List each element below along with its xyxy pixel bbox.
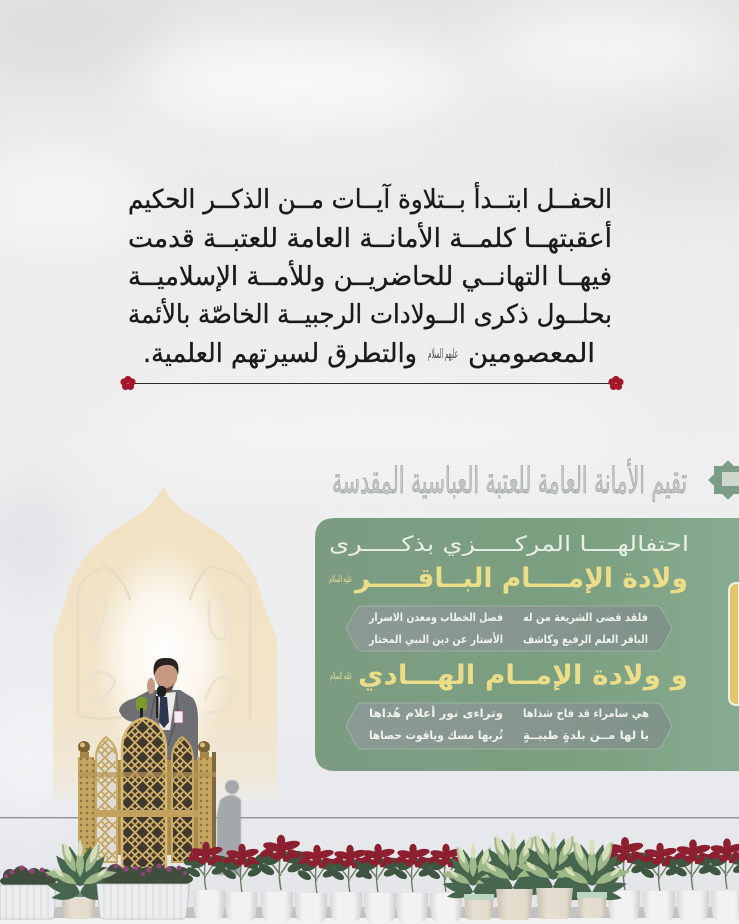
icon: red flower left — [120, 376, 136, 390]
jacket — [119, 690, 198, 760]
row of poinsettias — [183, 835, 739, 893]
heading: Imam Hadi: و ولادة الإمــام الهـــادي — [358, 660, 688, 691]
inner arch calligraphy panels — [78, 566, 250, 722]
teal pot — [61, 895, 96, 919]
ceramic pots — [464, 888, 607, 920]
variegated plant left — [44, 839, 117, 902]
shirt and tie — [156, 692, 176, 730]
icon: red flower right — [608, 376, 624, 390]
microphones — [157, 686, 166, 697]
variegated plants right — [440, 831, 631, 903]
yellow card edge — [729, 583, 739, 705]
hand — [147, 678, 155, 694]
green event panel: عليه السلام — [330, 671, 352, 682]
shadow on wall — [217, 780, 241, 875]
crossbars — [78, 772, 216, 777]
gold lectern — [78, 718, 216, 868]
icon: shrine logo — [708, 460, 739, 500]
right pillar — [197, 757, 212, 855]
base rail — [94, 760, 198, 855]
golden arch niche — [53, 486, 277, 800]
panel subtitle: احتفالهــــا المركـــــزي بذكـــــرى — [329, 532, 689, 556]
right lattice arch — [172, 737, 193, 862]
main paragraph: بحلــول ذكرى الــولادات الرجبيــة الخاصّة بالأئمة — [128, 297, 612, 330]
left lattice arch — [96, 737, 117, 862]
main paragraph: المعصومين — [468, 339, 595, 369]
verse box 1: فلقد قضى الشريعة من له — [523, 610, 648, 624]
main paragraph: الحفــل ابتــدأ بــتلاوة آيــات مــن الذكــر الحكيم — [128, 181, 612, 215]
main paragraph: أعقبتهــا كلمــة الأمانــة العامة للعتبــة قدمت — [128, 220, 612, 254]
verse box 1: الأستار عن دين النبي المختار — [368, 632, 503, 646]
verse box 1 — [346, 606, 672, 651]
ball finials — [78, 741, 90, 753]
main paragraph — [128, 181, 612, 369]
heading: Imam Baqir: ولادة الإمــــام البــاقـــــر — [353, 563, 688, 594]
row of white pots — [193, 890, 739, 922]
verse box 1: فصل الخطاب ومعدن الاسرار — [368, 610, 503, 625]
verse box 2 — [346, 703, 672, 749]
main paragraph: عليهم السلام — [428, 347, 458, 362]
speaker — [119, 658, 198, 760]
verse box 1: الباقر العلم الرفيع وكاشف — [523, 632, 648, 647]
lapel badge — [174, 711, 183, 723]
main paragraph: والتطرق لسيرتهم العلمية. — [143, 339, 417, 369]
center lattice arch — [122, 718, 166, 868]
green event panel — [315, 518, 739, 771]
green event panel: عليه السلام — [329, 574, 352, 585]
verse box 2: وتراءى نور أعلام هُداها — [369, 705, 503, 721]
verse box 2: يا لها مــن بلدةٍ طيبــةٍ — [523, 728, 649, 743]
head — [154, 661, 178, 689]
main paragraph: فيهــا التهانــي للحاضريــن وللأمــة الإسلاميــة — [128, 259, 612, 292]
divider with red flowers — [120, 376, 624, 390]
wall seam and stage — [0, 817, 739, 924]
left pillar — [78, 757, 94, 855]
center planter — [97, 884, 190, 919]
verse box 2: تُربها مسك وياقوت حصاها — [369, 728, 503, 743]
flower bushes behind planters — [0, 863, 193, 889]
verse box 2: هي سامراء قد فاح شذاها — [523, 706, 649, 720]
left planter — [0, 885, 56, 919]
